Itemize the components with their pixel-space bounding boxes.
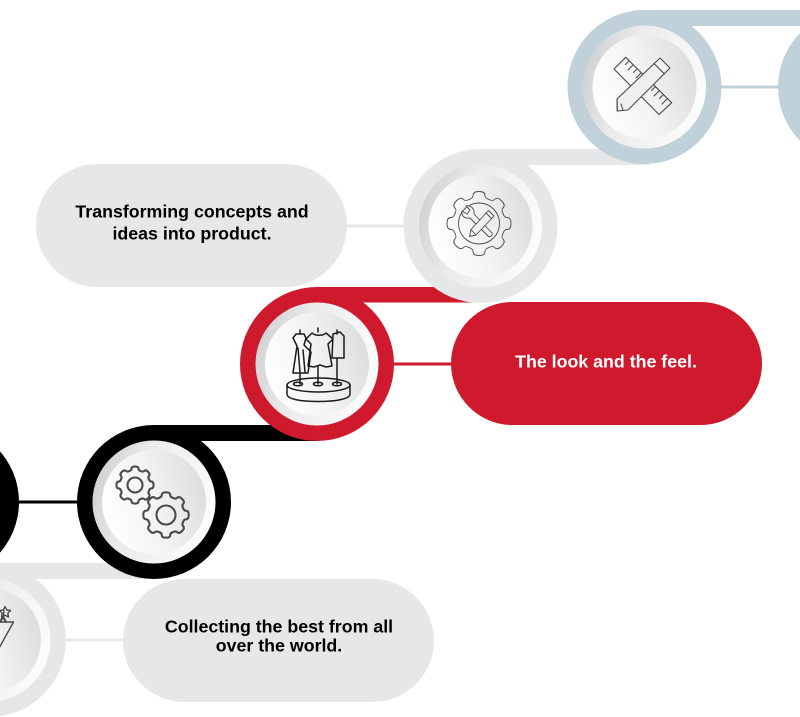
- step 4: black gears: [0, 425, 319, 579]
- icon: ruler and pencil: [614, 57, 672, 114]
- pill: look and feel: [451, 302, 762, 425]
- step 1: blue top: [568, 10, 800, 164]
- pill: collecting: over the world.: [216, 636, 342, 656]
- connector line: [340, 224, 410, 228]
- step 2: gray concepts: [36, 149, 650, 303]
- circle: [77, 425, 231, 579]
- pill: collecting: Collecting the best from all: [165, 616, 393, 636]
- icon: funnel and star: [0, 606, 14, 650]
- band: [154, 425, 319, 441]
- step 3: red look and feel: [240, 287, 762, 441]
- right blue circle: [778, 10, 800, 164]
- pill: collecting: [123, 579, 434, 702]
- connector line: [60, 638, 130, 642]
- connector line: [715, 86, 785, 88]
- step 5: collecting: [0, 563, 434, 717]
- icon: gears: [116, 466, 189, 538]
- pill: transforming: Transforming concepts and: [75, 202, 309, 222]
- band: [644, 10, 800, 26]
- circle: [240, 287, 394, 441]
- pill: transforming: [36, 164, 347, 287]
- icon: gear with wrench and pencil: [447, 192, 511, 256]
- circle: [404, 149, 558, 303]
- circle: [0, 563, 66, 717]
- pill: transforming: ideas into product.: [112, 224, 272, 244]
- band: [480, 149, 650, 165]
- circle: [568, 10, 722, 164]
- connector line: [388, 362, 458, 366]
- connector line: [15, 500, 81, 504]
- left black circle: [0, 425, 19, 579]
- icon: dresses on platform: [287, 328, 350, 402]
- band: [317, 287, 487, 302]
- band: [0, 563, 159, 579]
- pill: look and feel: The look and the feel.: [515, 352, 697, 372]
